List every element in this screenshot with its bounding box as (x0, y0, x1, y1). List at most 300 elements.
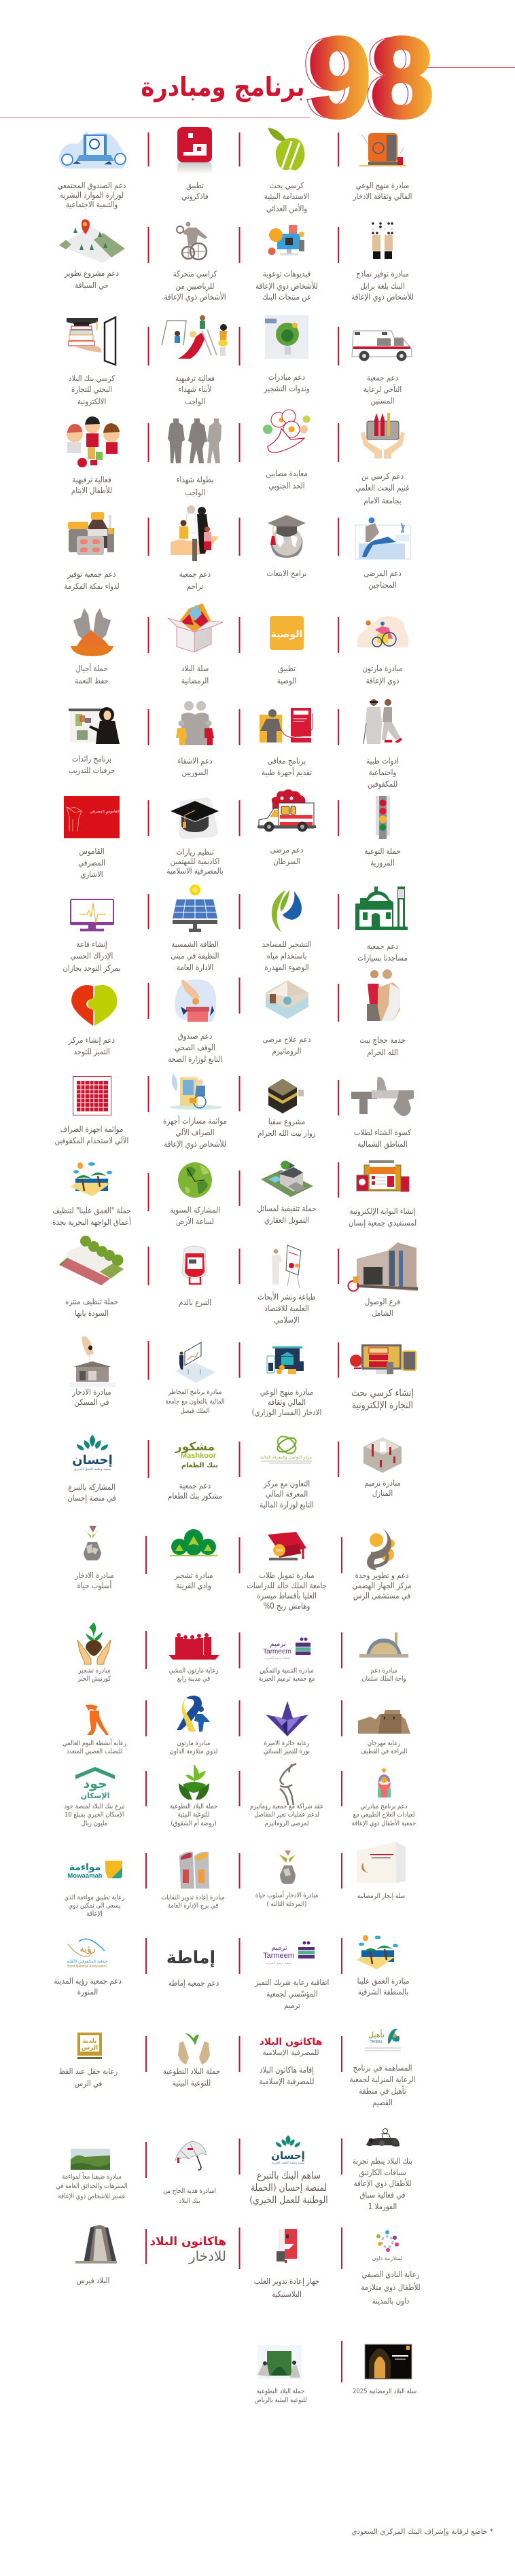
label: بطولة شهداء (177, 475, 213, 484)
label: الإسلامي (274, 1315, 300, 1325)
label: في مستشفى الرس (353, 1591, 410, 1600)
label: سلة البلاد (181, 664, 209, 673)
panel: sign language dictionary (64, 796, 120, 879)
label: المعرفة المالي (266, 1489, 308, 1499)
label: المشاركة بالتبرع (68, 1482, 116, 1492)
icon: Ehsan logo: إحسان (72, 1453, 113, 1467)
panel: Down syndrome summer club (361, 2230, 421, 2306)
icon: red cap and SAR: SAR (276, 1549, 283, 1553)
icon: apple with cutlery (268, 128, 304, 171)
icon: laptop illustration (59, 130, 126, 168)
panel: wheelchairs (164, 221, 226, 302)
heading: hackathon logo: للادخار (188, 2248, 226, 2264)
panel: Tarahum association (171, 505, 219, 591)
label: الروماتيزم (272, 1046, 301, 1056)
label: تطبيق (186, 181, 204, 191)
label: دعم الصندوق المجتمعي (58, 181, 126, 190)
label: لدعم عمليات تغير المفاصل (254, 1810, 319, 1819)
icon: man presenting (175, 1342, 215, 1383)
icon: donation box (175, 980, 216, 1022)
label: الادخار (المسار الوزاري) (252, 1408, 321, 1417)
panel: martyrs' children event (162, 315, 228, 406)
label: رعاية مهرجان (368, 1739, 400, 1747)
icon: blind man with helper (363, 699, 402, 744)
panel: Masajiduna association (355, 887, 408, 963)
icon: orange app: الوصية (271, 629, 302, 640)
icon: hands with sprout (178, 2033, 210, 2064)
panel: solar energy (171, 884, 219, 972)
panel: craftswomen program (69, 707, 120, 775)
label: المالية بالتعاون مع جامعة (165, 1397, 225, 1406)
label: دعم جمعية (179, 1481, 211, 1490)
label: دعم المرضى (363, 569, 402, 578)
label: الاشاري (80, 870, 103, 879)
label: مبادرة الادخار أسلوب حياة (255, 1890, 318, 1899)
label: الشامل (372, 1308, 393, 1318)
label: الوطنية للعمل الخيري) (249, 2195, 328, 2206)
label: لمستفيدي جمعية إنسان (349, 1218, 416, 1228)
label: الادارة العامة (177, 963, 213, 972)
icon: Al-Rass municipality logo: الرس (82, 2045, 98, 2052)
label: مبادرة تمويل طلاب (259, 1571, 315, 1580)
panel: mosque afforestation (262, 890, 311, 972)
icon: ATM and wheelchair user (170, 1073, 221, 1110)
panel: Ramadan basket 2025 (353, 2344, 416, 2395)
panel: our guest together Asir (56, 2149, 128, 2200)
icon: hackathon logo (260, 2037, 322, 2057)
panel: Joud housing donation (64, 1767, 125, 1827)
label: الواجب (185, 397, 205, 406)
icon: green trees (170, 1529, 217, 1556)
label: لوزارة الموارد البشرية (60, 190, 124, 200)
label: المصرفي (78, 858, 105, 867)
icon: red app (177, 127, 212, 174)
label: وندوات التشجير (264, 384, 310, 393)
label: دعم جمعية (367, 942, 398, 951)
label: إقامة هاكاثون البلاد (260, 2065, 314, 2075)
label: رعاية تطبيق مواءمة الذي (65, 1893, 124, 1901)
label: المالي وثقافة الادخار (353, 192, 412, 201)
label: القصيم (372, 2098, 393, 2107)
panel: afforestation seminars (264, 315, 310, 393)
panel: national charity campaign (249, 2135, 328, 2206)
label: حملة البلاد التطوعية (170, 1802, 217, 1810)
icon: Ehsan logo (271, 2135, 305, 2165)
label: دعم مبادرات (268, 372, 305, 382)
icon: recycling machine (277, 2229, 297, 2263)
panel: savings lifestyle phase three (255, 1850, 318, 1908)
label: لمنصة إحسان (الحملة (251, 2183, 327, 2194)
icon: beach with palms (357, 1935, 398, 1969)
panel: Mashkoor food bank (168, 1440, 222, 1501)
label: الرمضانية (181, 676, 209, 685)
icon: Joud logo: جود (83, 1776, 107, 1791)
icon: orange neuron (86, 1704, 109, 1735)
label: رعاية حفل عيد الفط (59, 2067, 118, 2076)
icon: Mowaamah logo: مواءمة (69, 1862, 101, 1873)
label: المسنين (371, 396, 394, 406)
icon: media monitor (268, 225, 304, 255)
label: تراحم (187, 582, 203, 591)
label: دعم كرسي بن (361, 471, 404, 482)
label: مبادرة منهج الوعي (356, 181, 409, 190)
label: تبرع بنك البلاد لمنصة جود (64, 1802, 125, 1810)
label: النظيفة في مبنى (171, 951, 219, 961)
label: سباقات الكارتنق (359, 2168, 406, 2178)
icon: kids with blocks (67, 416, 120, 467)
panel: research publishing (258, 1245, 316, 1325)
icon: Joud logo (75, 1767, 115, 1800)
label: فرع الوصول (365, 1297, 400, 1306)
icon: knee joint (280, 1764, 296, 1805)
icon: isometric map (59, 219, 125, 263)
label: مبادرة دعم (370, 1666, 397, 1675)
icon: purple monitor (70, 899, 114, 931)
panel: e-commerce chair (350, 1344, 416, 1411)
label: مبادرة تشجير (174, 1571, 213, 1580)
icon: Down association logo: لمتلازمة داون (372, 2255, 402, 2261)
panel: Al-Rass Eid festival (59, 2033, 118, 2088)
label: إنشاء كرسي بحث (351, 1388, 414, 1399)
label: دعم الاشقاء (178, 756, 212, 766)
icon: Tarmeem logo: جمعية ترميم الخيرية (265, 1657, 291, 1660)
label: الطاقة الشمسية (171, 940, 219, 949)
icon: praying hands with dates (71, 608, 113, 656)
label: فعالية ترفيهية (72, 475, 111, 484)
label: امبادرة هدية الحاج من (163, 2187, 216, 2195)
label: للرياضيين من (175, 281, 215, 291)
panel: accessible ATM (163, 1073, 227, 1149)
icon: isometric house (261, 1160, 313, 1197)
label: حملة البلاد التطوعية (257, 2387, 304, 2395)
icon: wheelchair basketball (357, 616, 408, 647)
label: التميز للتوحد (73, 1047, 110, 1056)
label: حملة التوعية (364, 846, 401, 856)
title: برنامج ومبادرة (141, 73, 305, 103)
label: التابع لوزارة الصحة (168, 1054, 222, 1064)
panel: karting experience (353, 2129, 412, 2211)
panel: rheumatism treatment (263, 980, 310, 1056)
panel: environmental volunteering (163, 2033, 220, 2088)
icon: bank building (348, 1242, 418, 1291)
panel: traffic awareness (364, 796, 401, 867)
label: تأهيل في منطقة (359, 2085, 406, 2096)
panel: Suqya project (258, 1079, 316, 1138)
icon: go-kart (366, 2129, 399, 2147)
number 98 outline: 8 (364, 14, 427, 141)
icon: Asir park photo (71, 2149, 110, 2170)
heading: hackathon logo: هاكاثون البلاد (149, 2235, 226, 2249)
label: للأطفال ذوي الإعاقة (353, 2178, 412, 2188)
label: الصراف الآلي (175, 1128, 215, 1137)
label: الوضوء المهدرة (264, 963, 309, 972)
panel: winter clothing (351, 1077, 414, 1149)
label: لأبناء شهداء (178, 384, 212, 394)
label: سلة البلاد الرمضانية 2025 (353, 2387, 416, 2395)
label: العلمية للاقتصاد (264, 1304, 309, 1313)
label: الاستدامة البيئية (264, 192, 309, 201)
label: الرعاية المنزلية لجمعية (350, 2075, 415, 2084)
label: البحثي للتجارة (71, 384, 112, 394)
label: للأشخاص ذوي الإعاقة (255, 281, 318, 291)
panel: braille samples (351, 222, 414, 302)
label: مبادرة إعادة تدوير النفايات (161, 1893, 225, 1901)
label: المنتزهات والحدائق العامة في (56, 2182, 128, 2190)
icon: Ehsan logo: إحسان (271, 2149, 305, 2162)
label: تنظيم زيارات (176, 847, 214, 857)
icon: Ehsan logo: منصة وطنية للعمل الخيري (271, 2162, 305, 2165)
label: كرسي بنك البلاد (69, 374, 116, 383)
label: والأمن الغذائي (266, 203, 307, 214)
icon: Mowaamah logo (67, 1861, 122, 1880)
label: واحة الملك سلمان (361, 1675, 406, 1683)
panel: King Khalid University students (247, 1532, 327, 1611)
icon: green bulb (265, 315, 308, 359)
label: حملة البلاد التطوعية (163, 2067, 220, 2076)
label: رعاية النادي الصيفي (361, 2270, 420, 2279)
panel: Ajyal food-saving campaign (71, 608, 113, 685)
panel: scientific chair support (356, 413, 410, 505)
label: لدواء بمكة المكرمة (64, 582, 120, 591)
label: مشكور بنك الطعام (168, 1491, 222, 1501)
icon: Taheel logo: تأهيل (368, 2029, 385, 2039)
label: القاموس (79, 846, 105, 856)
label: برنامج معافى (268, 756, 306, 766)
label: دعم جمعية توفير (67, 569, 116, 579)
panel: cancer patients (258, 789, 316, 866)
label: بجامعة الامام (363, 496, 402, 505)
label: المناطق الشمالية (357, 1139, 408, 1149)
icon: Ehsan logo (72, 1435, 113, 1471)
label: الوصية (277, 676, 296, 685)
icon: hexagon room (363, 1437, 402, 1473)
panel: electronic portal (349, 1160, 416, 1228)
icon: planting photo (258, 2345, 302, 2379)
label: المشاركة السنوية (170, 1205, 220, 1215)
icon: Tarmeem logo (263, 1637, 310, 1660)
label: فيديوهات توعوية (263, 269, 310, 279)
label: بالمصرفية الاسلامية (166, 866, 224, 876)
label: عن منتجات البنك (262, 292, 311, 302)
label: حرفيات للتدريب (69, 766, 115, 775)
panel: waste recycling (161, 1852, 225, 1910)
panel: autism excellence center (68, 985, 117, 1056)
label: أعماق الواجهة البحرية بجدة (52, 1217, 131, 1227)
number 98 gradient: 9 (308, 14, 371, 141)
icon: figures logo (378, 1768, 391, 1797)
panel: financial risk program (165, 1342, 225, 1415)
icon: Mashkoor logo (175, 1440, 218, 1469)
label: رعاية جائزة الاميرة (264, 1739, 309, 1747)
panel: scholarship programs (267, 515, 306, 578)
label: دعم جمعية (179, 569, 211, 579)
label: التابع لوزارة المالية (260, 1500, 314, 1509)
icon: ambulance with ribbon creature (258, 789, 316, 831)
icon: books on tablet (67, 317, 116, 365)
label: عقد شراكة مع جمعية روماتيزم (250, 1802, 323, 1810)
icon: isometric room (266, 980, 308, 1019)
icon: Ruya logo (67, 1939, 107, 1969)
icon: traffic light (376, 796, 390, 839)
label: التبرع بالدم (179, 1298, 211, 1307)
dividers (145, 132, 342, 2382)
number 98 gradient: 8 (370, 14, 433, 141)
label: دعم جمعية إماطة (168, 1978, 219, 1988)
label: مركز الجهاز الهضمي (352, 1581, 412, 1590)
label: دعم جمعية رؤية المدينة (54, 1976, 122, 1986)
label: المؤسّسي لجمعية (266, 1989, 318, 1999)
panel: Moafa program (260, 708, 313, 777)
label: رعاية مارثون المشي (169, 1666, 218, 1675)
label: نورة للتميز النسائي (264, 1747, 310, 1755)
label: الآلي لاستخدام المكفوفين (55, 1136, 128, 1146)
number 98 gradient (308, 14, 433, 141)
label: للأشخاص ذوي الإعاقة (164, 1139, 226, 1149)
icon: red crowd (168, 1633, 219, 1660)
icon: purple star (266, 1701, 308, 1736)
label: دعم علاج مرضى (263, 1035, 310, 1044)
icon: red square cover: القاموس المصرفي (90, 810, 120, 814)
panel: Islamic banking hackathon (260, 2037, 322, 2086)
icon: dialysis machine (260, 708, 313, 743)
panel: elderly care association (352, 331, 412, 406)
label: في الرس (75, 2079, 102, 2088)
label: باستخدام مياه (267, 951, 306, 961)
panel: digestive unit Al-Rass (352, 1529, 412, 1600)
label: مبادرة منهج الوعي (260, 1387, 313, 1397)
icon: mosque in oasis (359, 1632, 408, 1658)
label: الفورملا 1 (368, 2202, 397, 2211)
panel: seabed cleaning Jeddah (52, 1162, 131, 1227)
label: للتوعية البيئية بالرياض (254, 2396, 307, 2404)
label: موائمة اجهزة الصراف (60, 1124, 123, 1134)
panel: racing project (59, 219, 125, 290)
icon: earth clock (178, 1162, 212, 1198)
label: ساهم البنك بالتبرع (257, 2170, 321, 2181)
icon: hands with tablet (361, 413, 405, 459)
label: دعم جمعية (367, 373, 398, 382)
label: سلة إنجاز الرمضانية (357, 1892, 405, 1900)
panel: savings hackathon (149, 2235, 226, 2264)
icon: hackathon logo: هاكاثون البلاد (260, 2037, 322, 2047)
icon: Ramadan box (357, 1842, 406, 1883)
icon: food box (168, 603, 223, 652)
icon: Ruya logo: رؤية (79, 1944, 96, 1954)
label: داون بالمدينة (372, 2296, 409, 2306)
icon: Tarmeem logo (263, 1942, 315, 1965)
icon: blood bag (182, 1246, 207, 1284)
label: دعم مشروع تطوير (64, 268, 119, 278)
decorative line right (421, 67, 515, 68)
label: غنيم البحث العلمي (356, 483, 410, 493)
icon: ambulance (352, 331, 412, 361)
label: مساجدنا بسيارات (357, 953, 408, 963)
panel: sensory room (63, 899, 120, 973)
label: دعم مرضى (270, 845, 303, 855)
label: ترميم (284, 2001, 300, 2010)
label: الملك فيصل (181, 1407, 209, 1415)
label: مبادرة ضيفنا معاً لمواءمة (62, 2171, 122, 2181)
panel: King Salman oasis (359, 1632, 408, 1683)
label: حملة تثقيفية لمسائل (257, 1204, 317, 1213)
icon: hand and house (69, 1336, 116, 1387)
label: في مدينة رابغ (177, 1675, 210, 1683)
icon: green mosque (355, 887, 408, 930)
label: المرورية (370, 858, 395, 867)
label: رعاية أنشطة اليوم العالمي (63, 1738, 126, 1747)
label: المنازل (372, 1488, 393, 1498)
label: السوريين (182, 768, 208, 778)
label: دعم صندوق (178, 1031, 212, 1041)
panel: Ramadan basket (168, 603, 223, 685)
label: مبادرة تشجير (77, 1666, 111, 1675)
icon: safe (359, 133, 406, 166)
panel: Down syndrome marathon (170, 1696, 217, 1755)
icon: soldiers (168, 418, 221, 463)
label: الحد الجنوبي (268, 481, 305, 490)
label: لعيادات العلاج الطبيعي مع (353, 1810, 414, 1819)
panel: Al Bilad Fares (75, 2225, 117, 2285)
panel: Tawfeer medicine association (64, 512, 120, 591)
panel: financial awareness curriculum (353, 133, 412, 201)
panel: disability marathon (357, 616, 408, 685)
label: ادوات طبية (366, 756, 399, 766)
icon: winter clothes (351, 1077, 414, 1116)
label: للتوعية البيئية (178, 1810, 209, 1819)
panel: earth hour (170, 1162, 220, 1227)
icon: puzzle heart (71, 985, 117, 1026)
panel: health endowment fund (168, 980, 222, 1064)
icon: patient in bed (355, 518, 410, 559)
icon: braille hands (372, 222, 393, 259)
panel: Mowaamah app (65, 1861, 124, 1918)
panel: Enjaz Ramadan basket (357, 1842, 406, 1900)
panel: Al-Sawda park cleaning (59, 1236, 125, 1318)
label: دعم برنامج مبادرتي (361, 1802, 407, 1810)
icon: wheelchair tennis player (177, 221, 207, 260)
label: كرسي بحث (270, 181, 304, 190)
label: البراحة في القطيف (361, 1747, 407, 1755)
icon: Al-Rass municipality logo: بلدية (82, 2038, 97, 2045)
label: جهاز إعادة تدوير العلب (254, 2276, 319, 2286)
label: الله الحرام (367, 1048, 398, 1057)
icon: devices and books (350, 1344, 416, 1374)
icon: graduation cap on globe (268, 515, 306, 558)
label: للمصرفية الإسلامية (260, 2077, 314, 2086)
label: التجارة الإلكترونية (352, 1400, 413, 1411)
label: العليا بأقساط ميسرة (257, 1590, 317, 1600)
label: السرطان (273, 857, 300, 866)
label: الإدراك الحسي (71, 951, 113, 961)
label: التمويل العقاري (264, 1215, 309, 1225)
icon: plant in vase (84, 1526, 101, 1560)
panel: home restoration (363, 1437, 402, 1498)
label: في منصة إحسان (67, 1493, 116, 1503)
label: مبادرة مارثون (177, 1739, 210, 1747)
panel: Khobar corniche afforestation (77, 1622, 111, 1683)
icon: playground (162, 315, 228, 359)
label: الإسكان الخيري بمبلغ 10 (65, 1810, 124, 1819)
label: حملة "العمق علينا" لتنظيف (52, 1206, 131, 1216)
label: حفظ النعمة (75, 676, 109, 685)
panel: Fathakroni app (177, 127, 212, 201)
icon: Tarmeem logo: ترميم (271, 1944, 287, 1952)
panel: accessible branch (348, 1242, 418, 1318)
label: جامعة الملك خالد للدراسات (247, 1581, 327, 1590)
label: الالكترونية (77, 397, 106, 406)
panel: development with Tarmeem (259, 1637, 315, 1683)
icon: dark arch poster (365, 2344, 412, 2379)
